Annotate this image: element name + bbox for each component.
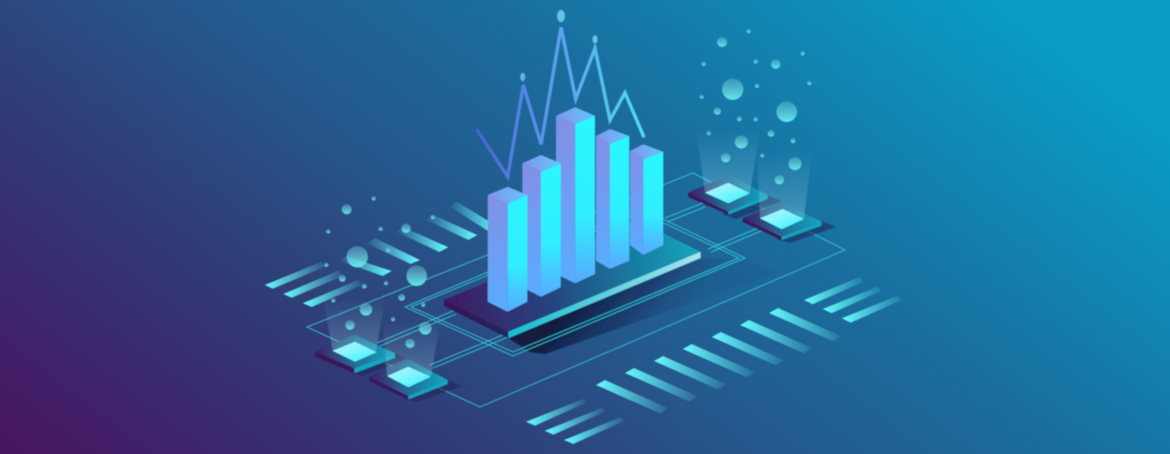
inner double circuit outline — [405, 208, 745, 356]
bottom falling data strips — [596, 308, 841, 413]
bar 5 — [630, 144, 663, 255]
bubbles: left cluster — [324, 196, 435, 348]
chip: lower left 2 — [369, 359, 462, 402]
left falling data strips — [340, 202, 500, 276]
chip: lower left 1 — [315, 335, 408, 376]
light beams — [323, 130, 812, 376]
chart platform — [444, 220, 701, 338]
bubbles: right cluster — [700, 29, 812, 184]
bar 1 — [488, 187, 527, 312]
chip connector lines — [377, 203, 761, 368]
trend line with peak markers — [477, 10, 644, 177]
bottom rising data strips — [526, 399, 624, 444]
platform shadow — [508, 258, 778, 354]
chip: upper right 2 — [743, 202, 836, 243]
bar 3 — [556, 107, 595, 283]
outer circuit outline — [307, 173, 845, 407]
left rising data strips — [265, 262, 362, 307]
bar 2 — [522, 155, 561, 297]
chip: upper right 1 — [688, 175, 782, 219]
right rising data strips — [804, 277, 902, 323]
bar 4 — [596, 129, 629, 269]
